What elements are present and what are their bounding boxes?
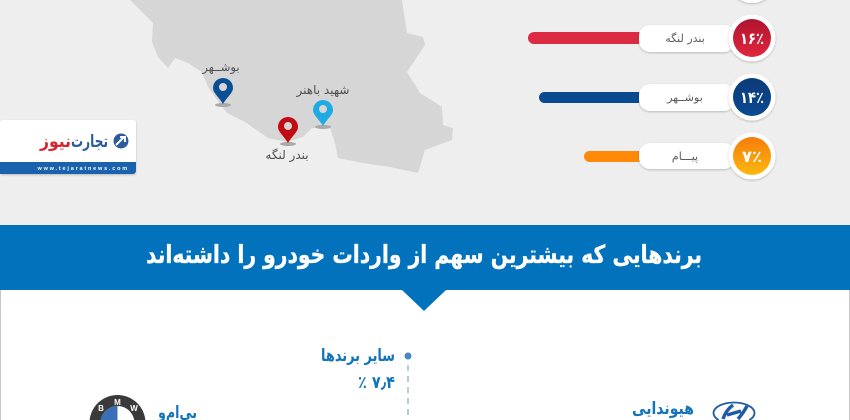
icon: Hyundai logo: [714, 403, 754, 420]
lower white panel: [0, 289, 850, 420]
map pin: Bushehr: [213, 78, 233, 107]
label: other brands: سایر برندها: [321, 346, 395, 366]
value badge: ۱۶٪: [740, 29, 764, 48]
value badge: [728, 74, 776, 120]
map pin: Shahid Bahonar: [313, 100, 333, 129]
pointer: [401, 289, 447, 311]
label pill: [639, 84, 735, 111]
logo wordmark: news: نیوز: [39, 132, 71, 152]
icon: BMW logo: W: [130, 404, 138, 413]
label pill: [639, 143, 735, 169]
label pill: پیـــام: [672, 150, 698, 163]
row: Payam 7%: [584, 132, 776, 180]
map label: Shahid Bahonar: شهید باهنر: [296, 83, 349, 98]
label: other brands: ۷٫۴ ٪: [358, 373, 395, 393]
title band: [0, 225, 850, 311]
logo url: www.tejaratnews.com: [37, 166, 129, 172]
label pill: [639, 25, 735, 52]
value badge: [728, 132, 776, 180]
label pill: بندر لنگه: [665, 32, 705, 45]
icon: BMW logo: M: [114, 398, 121, 407]
label: Hyundai: هیوندایی: [632, 399, 694, 419]
value badge: ۷٪: [742, 147, 762, 166]
label: other brands: [321, 346, 395, 393]
logo: Tejarat News: [0, 120, 136, 174]
bar: [528, 32, 644, 44]
map: [130, 0, 453, 173]
timeline: [404, 352, 412, 420]
icon: BMW logo: B: [98, 404, 104, 413]
title: برندهایی که بیشترین سهم از واردات خودرو را داشته‌اند: [146, 240, 702, 270]
label pill: بوشــهر: [666, 91, 703, 104]
logo wordmark: tejarat: تجارت: [71, 132, 108, 152]
top partial circle: [728, 0, 776, 3]
top background: [0, 0, 850, 225]
row: Bandar Lengeh 16%: [528, 14, 776, 62]
bar: [539, 92, 644, 103]
row: Bushehr 14%: [539, 74, 776, 120]
map label: Bushehr: بوشــهر: [201, 60, 240, 75]
map pin: Bandar Lengeh: [278, 117, 298, 146]
icon: BMW logo: [90, 395, 145, 420]
logo icon: [114, 134, 128, 148]
bar: [584, 151, 644, 162]
map label: Bandar Lengeh: بندر لنگه: [265, 148, 309, 163]
value badge: [728, 14, 776, 62]
value badge: ۱۴٪: [740, 88, 764, 107]
